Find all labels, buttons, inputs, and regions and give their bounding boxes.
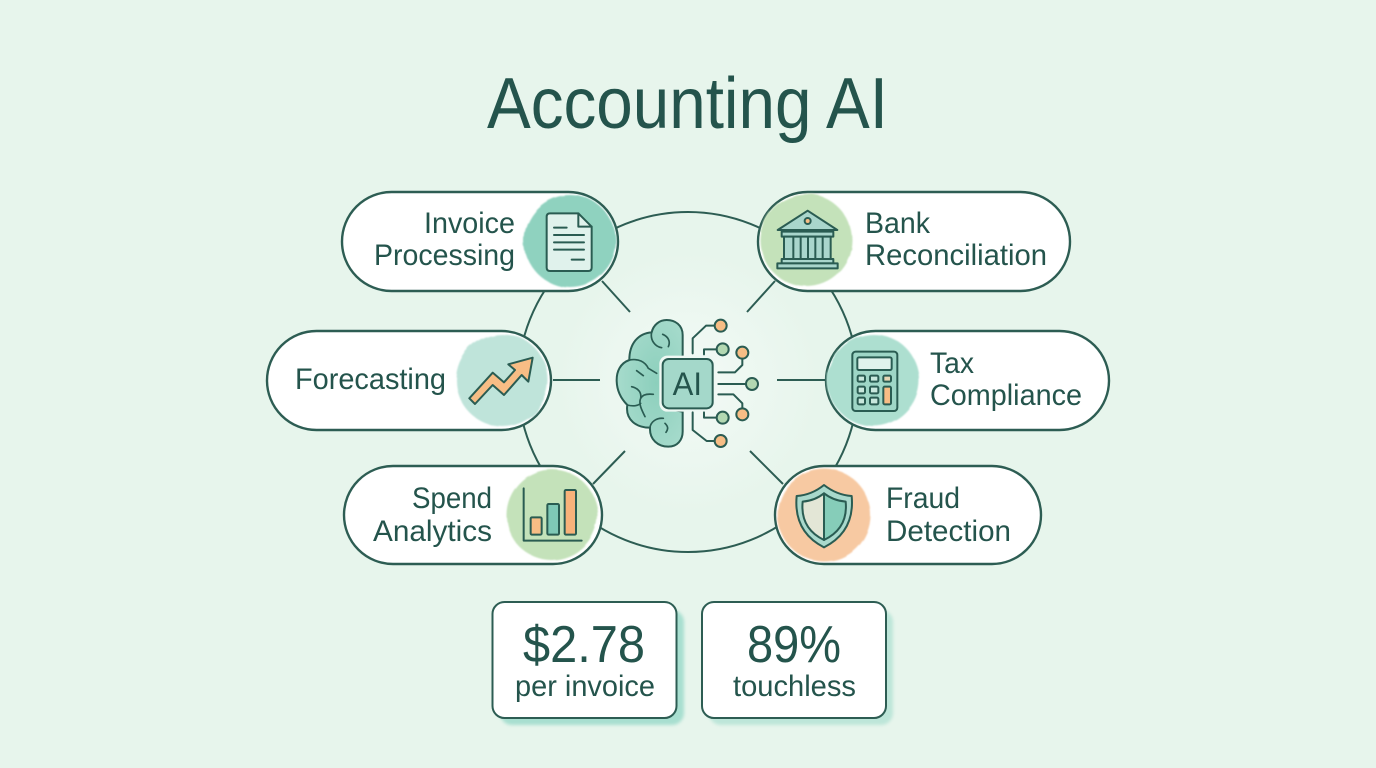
stat card: 89% touchless: 89% [747, 616, 841, 674]
label: Analytics [373, 515, 492, 548]
brain [617, 320, 683, 447]
icon: bank [760, 194, 852, 286]
label: Compliance [930, 379, 1082, 412]
stat card: $2.78 per invoice [492, 602, 684, 725]
stat card: 89% touchless: touchless [733, 670, 856, 703]
stat card: $2.78 per invoice: $2.78 [523, 616, 645, 674]
panel: Tax Compliance [826, 331, 1109, 430]
label: Tax [930, 347, 974, 380]
label [865, 207, 1047, 272]
label [373, 482, 492, 548]
label: Processing [374, 239, 515, 272]
label [930, 347, 1082, 412]
central AI brain icon [617, 320, 758, 447]
label: Reconciliation [865, 239, 1047, 272]
label: Forecasting [295, 363, 446, 396]
stat card: $2.78 per invoice: per invoice [515, 670, 655, 703]
panel: Invoice Processing [342, 192, 618, 291]
circuit traces [693, 320, 758, 447]
panel: Forecasting [267, 331, 551, 430]
stat card: 89% touchless [702, 602, 893, 725]
AI chip: AI [673, 366, 702, 402]
connector ring and spokes [518, 212, 858, 552]
panel: Spend Analytics [344, 466, 602, 564]
icon: calculator [827, 334, 919, 426]
icon: invoice document [524, 195, 616, 287]
panel: Fraud Detection [775, 466, 1041, 564]
panel: Bank Reconciliation [758, 192, 1070, 291]
title: Accounting AI [487, 64, 888, 144]
label: Bank [865, 207, 931, 240]
icon: shield [778, 468, 870, 562]
AI chip [659, 356, 716, 412]
icon: bar chart [506, 470, 598, 560]
icon: growth arrow [456, 334, 548, 426]
label [374, 207, 515, 272]
label: Fraud [886, 482, 960, 515]
label: Spend [412, 482, 492, 515]
label: Invoice [424, 207, 515, 240]
label: Detection [886, 515, 1011, 548]
label [886, 482, 1011, 548]
